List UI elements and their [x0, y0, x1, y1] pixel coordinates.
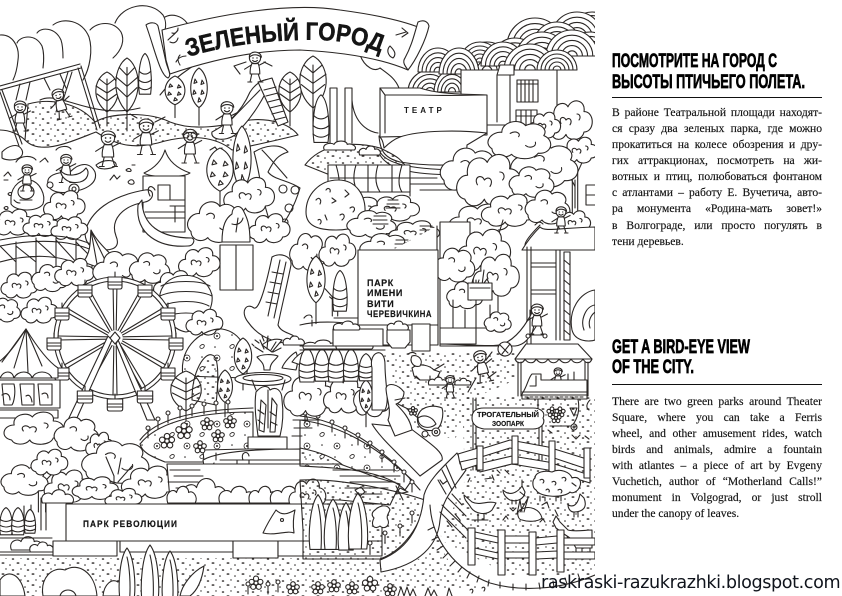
illustration: green city coloring page — [0, 5, 595, 596]
sign: park of revolution — [0, 504, 382, 558]
goose — [568, 494, 585, 517]
English body text: monument in Volgograd, or just stroll — [612, 491, 822, 504]
playground ground with dots — [0, 98, 298, 150]
children group on the path — [96, 114, 202, 169]
lawn dots — [380, 352, 515, 440]
plants and blocks by billboard — [290, 234, 430, 351]
theater back building — [330, 65, 557, 143]
pond water — [167, 464, 400, 505]
goat — [553, 510, 592, 560]
English body text: under the canopy of leaves. — [612, 507, 739, 520]
watermark: raskraski-razukrazhki.blogspot.com — [541, 573, 840, 593]
toy car with driver — [47, 146, 96, 194]
billboard label: ПАРК — [367, 278, 394, 288]
carousel — [0, 329, 60, 418]
English body text: with atlantes – a piece of art by Evgeny — [612, 459, 822, 472]
English body text: birds and animals, admire a fountain — [612, 443, 822, 456]
statue on pedestal — [188, 177, 290, 290]
child with flowers — [428, 376, 471, 398]
playground structure — [522, 207, 595, 350]
billboard label: ИМЕНИ — [367, 288, 403, 298]
central bushes — [72, 440, 169, 504]
fence around flower hill — [300, 411, 420, 492]
hen — [503, 480, 525, 504]
Russian body text: прокатиться на колесе обозрения и дру- — [612, 138, 822, 151]
road with scooter kid — [440, 304, 547, 346]
panel: Russian description — [612, 50, 822, 248]
Russian body text: в Волгограде, или просто погулять в — [612, 219, 822, 232]
front fence — [440, 494, 595, 575]
zoo sign label: ЗООПАРК — [492, 419, 524, 428]
running child — [468, 349, 496, 392]
billboard label: ВИТИ — [367, 299, 394, 309]
theater — [379, 88, 487, 196]
Russian heading — [612, 50, 805, 92]
grass marks — [440, 470, 576, 532]
Russian body text: вотных и птиц, полюбоваться фонтаном — [612, 170, 822, 183]
fountain with statues and stairs — [202, 379, 344, 465]
cypress garden by the road — [300, 480, 425, 559]
Russian body text: с атлантами – работу Е. Вучетича, авто- — [612, 186, 822, 199]
slide with kids — [212, 52, 288, 139]
zoo sign label: ТРОГАТЕЛЬНЫЙ — [477, 410, 539, 419]
Russian body text: В районе Театральной площади находят- — [612, 106, 822, 119]
dog — [408, 352, 444, 380]
left trees under ferris wheel — [0, 412, 113, 552]
slide at statue — [244, 255, 298, 343]
billboard label: ЧЕРЕВИЧКИНА — [367, 309, 432, 319]
bottom ground with bushes and flowers — [0, 545, 485, 596]
tree cluster behind ferris wheel — [0, 248, 220, 323]
Russian body text: ся сразу два зеленых парка, где можно — [612, 122, 822, 135]
woman with pram — [386, 385, 443, 437]
divider — [612, 384, 822, 385]
banner with title — [146, 6, 430, 78]
back fence — [458, 436, 590, 483]
zoo sign — [472, 398, 544, 470]
Russian body text — [612, 106, 822, 248]
swing set — [0, 64, 100, 146]
English body text: Vuchetich, author of “Motherland Calls!” — [612, 475, 822, 488]
English body text: wheel, and other amusement rides, watch — [612, 427, 822, 440]
scattered grass tufts — [2, 146, 222, 210]
flower bushes with striped hedges — [305, 141, 499, 262]
leaf trees near statue — [207, 126, 300, 232]
far trees and stripes hill — [408, 12, 612, 92]
rooster — [464, 495, 496, 522]
English body text: Square, where you can take a Ferris — [612, 411, 822, 424]
zoo ground — [440, 395, 595, 575]
ball — [498, 342, 512, 356]
sign label: ПАРК РЕВОЛЮЦИИ — [83, 519, 178, 530]
leaf trees upper left — [96, 53, 329, 142]
fountain top — [235, 338, 291, 386]
mid row: cypress trees and trees — [284, 340, 390, 427]
stone path border — [380, 505, 595, 590]
road — [372, 424, 466, 572]
ferris wheel — [47, 272, 183, 420]
striped balloon — [160, 275, 223, 335]
billboard: park named after Vitya Cherevichkin — [358, 250, 438, 345]
Russian body text: ра монумента «Родина-мать зовет!» — [612, 202, 822, 215]
English body text — [612, 395, 822, 520]
sheep — [533, 470, 581, 501]
big cloud trees right — [449, 101, 598, 262]
hedges — [41, 478, 326, 504]
title: ЗЕЛЕНЫЙ ГОРОД — [185, 17, 385, 58]
Russian body text: гих аттракционах, посмотреть на жи- — [612, 154, 822, 167]
flower hill — [140, 400, 253, 462]
panel: English description — [612, 338, 822, 520]
theater label: ТЕАТР — [404, 106, 445, 115]
trees by the building — [434, 222, 519, 344]
pagoda tower with spiral slide — [44, 150, 194, 250]
zoo animals — [440, 470, 592, 560]
Russian body text: тени деревьев. — [612, 235, 684, 248]
English body text: There are two green parks around Theater — [612, 395, 822, 408]
background clouds — [0, 6, 399, 95]
roller coaster — [0, 208, 110, 274]
second toy car — [11, 156, 44, 210]
flower bush and leaf trees — [171, 329, 304, 425]
food stall — [515, 344, 592, 430]
divider — [612, 97, 822, 98]
English heading — [612, 338, 750, 376]
flag — [263, 510, 295, 534]
rabbit — [517, 498, 542, 521]
banner leaves — [168, 28, 408, 65]
